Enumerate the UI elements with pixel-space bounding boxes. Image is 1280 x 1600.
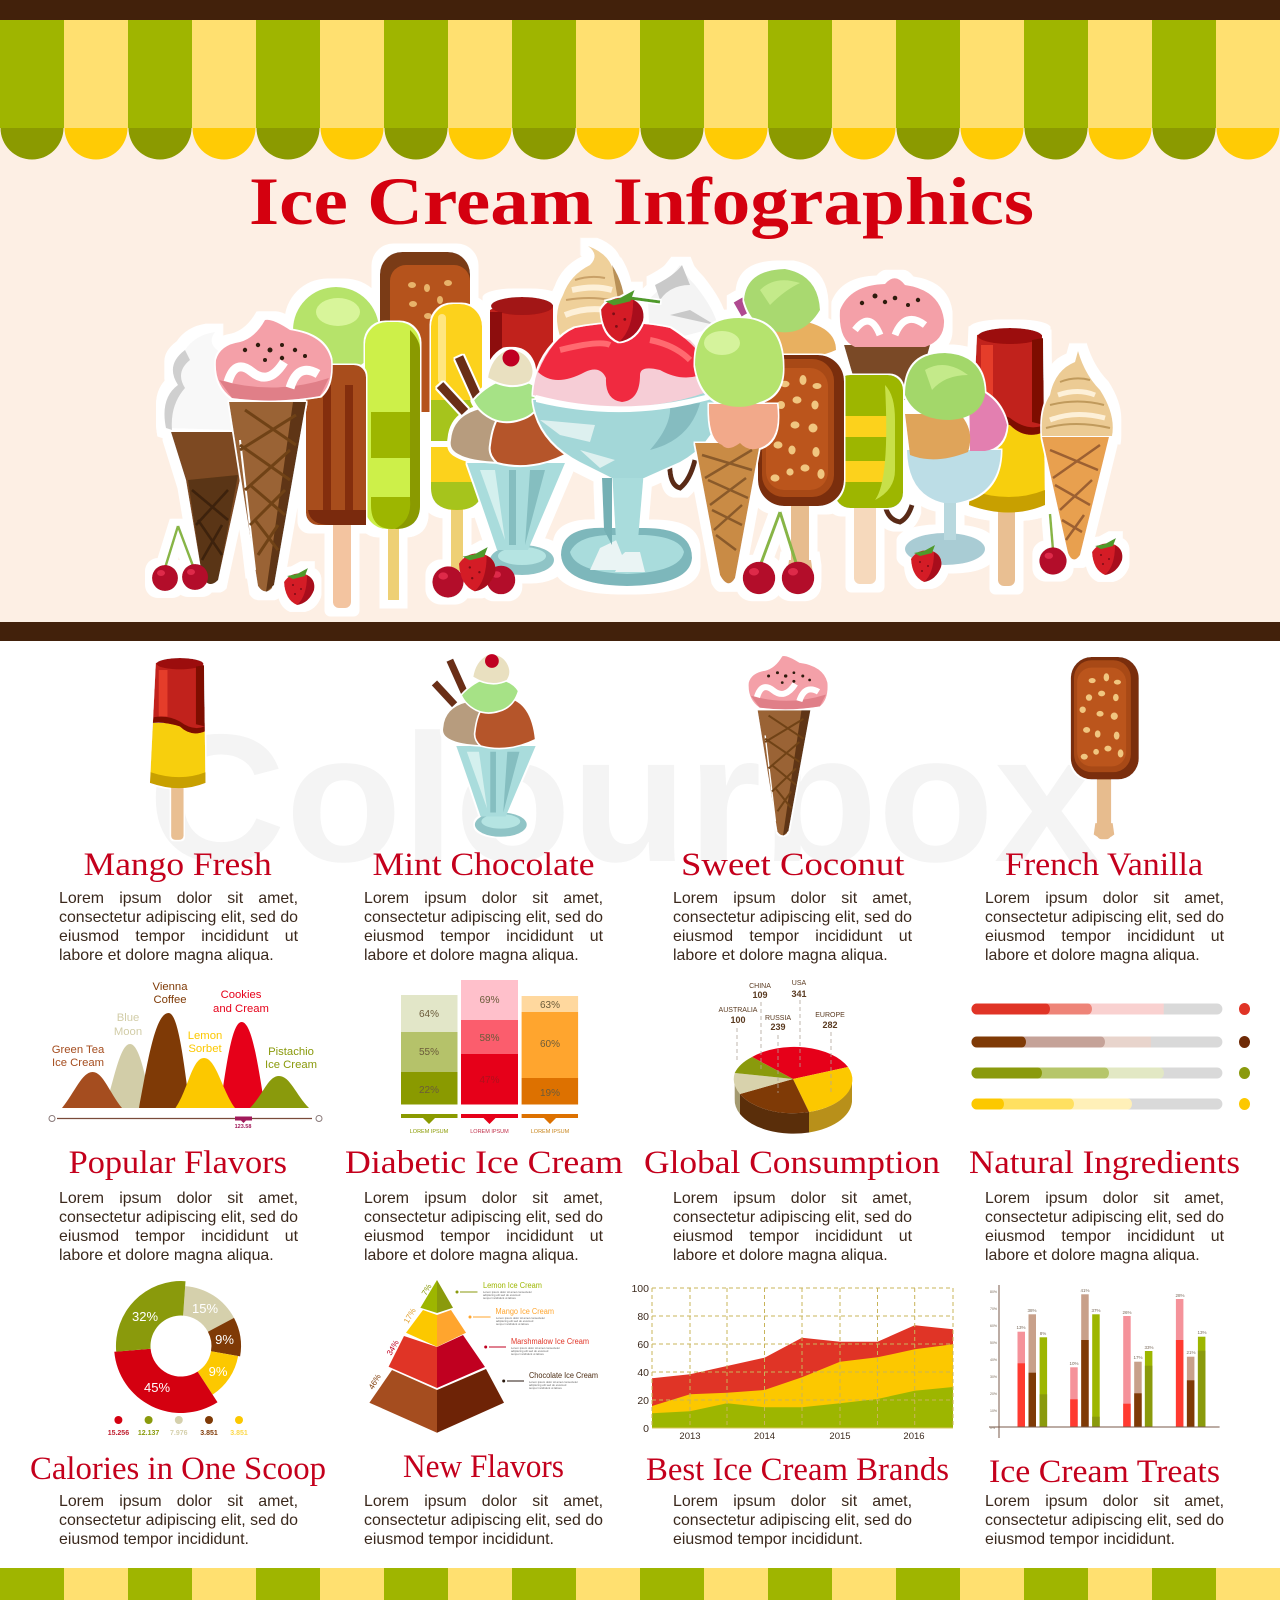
chart: grouped bars: 17% [1133,1355,1143,1360]
chart: donut: 3.851 [230,1430,248,1437]
callout: Chocolate [502,1371,598,1390]
chart: grouped bars: 21% [1186,1350,1196,1355]
strawberry on top [601,290,660,342]
chart: area: 2016 [903,1431,925,1442]
chart: 3D pie: 100 [730,1015,746,1025]
green scoop back [293,287,379,373]
chart: flavor peaks: Lemon [188,1030,222,1042]
callout: Marshmalow: adipiscing elit sed do eiusmod [511,1349,549,1353]
chart: progress bars [971,1003,1250,1110]
chart: donut: 3.851 [200,1430,218,1437]
heading: Ice Cream Treats: Ice Cream Treats [989,1454,1220,1490]
callout: Marshmalow: Marshmalow Ice Cream [511,1337,589,1346]
chart: donut [108,1281,248,1437]
chart: area: 0 [643,1423,649,1435]
chart: pyramid: 34% [385,1339,401,1357]
awning stripes [0,20,1280,160]
panel: Best Ice Cream Brands [631,1283,953,1554]
chart: flavor peaks: Vienna [153,981,188,993]
text: Sweet Coconut body: Lorem ipsum dolor sit amet, consectetur adipiscing elit, sed do eiusmod tempor incididunt ut labore et dolore magna aliqua. [673,890,912,964]
callout: Chocolate: tempor incididunt ut labore [529,1386,562,1390]
heading: Calories in One Scoop: Calories in One Scoop [30,1451,326,1487]
chart: stacked columns: 63% [540,1000,560,1011]
chart: area [631,1283,953,1442]
chart: donut: 15% [192,1301,218,1316]
watermark: Colourbox [148,696,1100,900]
brown popsicle [306,365,366,608]
callout: Chocolate: adipiscing elit sed do eiusmod [529,1383,567,1387]
heading: Global Consumption: Global Consumption [644,1145,940,1181]
heading: Mango Fresh: Mango Fresh [84,847,272,883]
icon: red yellow popsicle [150,658,205,840]
chart: flavor peaks: and Cream [213,1003,269,1015]
panel: Global Consumption [644,980,940,1269]
panel: Calories in One Scoop [30,1281,326,1554]
callout: Mango: Mango Ice Cream [496,1307,554,1316]
heading: Popular Flavors: Popular Flavors [69,1145,287,1181]
chart: stacked columns: LOREM IPSUM [410,1129,449,1135]
chart: area: 100 [631,1283,649,1295]
chart: grouped bars: 40% [990,1358,997,1362]
icon: nut bar [1071,657,1139,839]
chart: stacked columns: 69% [479,995,500,1006]
panel: Sweet Coconut [673,656,914,969]
chocolate bar back [380,252,470,412]
text: Diabetic Ice Cream body: Lorem ipsum dolor sit amet, consectetur adipiscing elit, sed do eiusmod tempor incididunt ut labore et dolore magna aliqua. [364,1190,603,1264]
chart: flavor peaks: Sorbet [188,1043,222,1055]
panel: Mango Fresh [59,658,300,969]
chart: grouped bars: 50% [990,1341,997,1345]
back cone with green scoop [744,269,836,358]
chart: 3D pie: RUSSIA [765,1015,791,1022]
beige swirl behind sundae [557,246,625,345]
panel: Mint Chocolate [364,654,605,969]
chart: grouped bars: 80% [990,1290,997,1294]
panel: French Vanilla [985,657,1226,969]
chart: flavor peaks: 123.58 [235,1124,251,1130]
right small sundae [905,353,1007,565]
chart: 3D pie: 239 [770,1022,786,1032]
panel: Diabetic Ice Cream [345,980,623,1269]
chart: 3D pie: 282 [822,1020,838,1030]
red yellow popsicle [969,328,1045,586]
icon: strawberry cone [749,656,828,836]
strawberry waffle cone [216,320,331,592]
chart: donut: 9% [215,1332,234,1347]
chart: grouped bars: 8% [1040,1331,1046,1336]
chart: grouped bars: 13% [1197,1330,1207,1335]
chart: 3D pie: CHINA [749,983,771,990]
chart: area: 60 [637,1339,649,1351]
chart: grouped bars: 38% [1027,1308,1037,1313]
chart: stacked columns [401,980,578,1135]
chart: grouped bars [989,1285,1220,1438]
chart: flavor peaks: Cookies [221,989,262,1001]
chart: 3D pie: 341 [791,989,807,999]
green yellow bar [835,375,903,584]
callout: Mango: tempor incididunt ut labore [496,1322,529,1326]
chart: stacked columns: LOREM IPSUM [531,1129,570,1135]
lower header brown band [0,622,1280,641]
callout: Lemon: Lorem ipsum dolor sit amet consectetur [483,1290,532,1294]
text: Mint Chocolate body: Lorem ipsum dolor sit amet, consectetur adipiscing elit, sed do eiusmod tempor incididunt ut labore et dolore magna aliqua. [364,890,603,964]
chart: grouped bars: 28% [1175,1293,1185,1298]
text: French Vanilla body: Lorem ipsum dolor sit amet, consectetur adipiscing elit, sed do eiusmod tempor incididunt ut labore et dolore magna aliqua. [985,890,1224,964]
heading: Natural Ingredients: Natural Ingredients [969,1145,1240,1181]
panel: Ice Cream Treats [985,1285,1226,1554]
fruit left [152,526,314,605]
callout: Lemon: tempor incididunt ut labore [483,1296,516,1300]
strawberry cone back [840,278,944,400]
right cream cone [1042,351,1113,560]
chart: donut: 32% [132,1309,158,1324]
chocolate nut bar [758,355,844,580]
chart: 3D pie: EUROPE [815,1012,845,1019]
big sundae [533,323,725,586]
chart: grouped bars: 13% [1016,1325,1026,1330]
callout: Chocolate: Chocolate Ice Cream [529,1371,598,1380]
chart: donut: 15.256 [108,1430,129,1437]
chart: donut: 9% [209,1364,228,1379]
chart: stacked columns: 64% [419,1009,439,1020]
chart: grouped bars: 37% [1091,1308,1101,1313]
chart: flavor peaks: Green Tea [52,1044,105,1056]
text: Treats body: Lorem ipsum dolor sit amet, consectetur adipiscing elit, sed do eiusmod tempor incididunt. [985,1493,1224,1548]
icon: sundae [434,654,536,837]
white swirl cone [164,332,242,584]
chart: stacked columns: 58% [479,1033,500,1044]
chart: stacked columns: 47% [479,1075,500,1086]
chart: grouped bars: 26% [1122,1310,1132,1315]
chart: area: 20 [637,1395,649,1407]
chart: grouped bars: 10% [1069,1361,1079,1366]
chart: flavor peaks: Moon [114,1026,142,1038]
chart: pyramid [367,1280,598,1433]
chart: stacked columns: 60% [540,1039,560,1050]
text: New Flavors body: Lorem ipsum dolor sit amet, consectetur adipiscing elit, sed do eiusmod tempor incididunt. [364,1493,603,1548]
chart: 3D pie: 109 [752,990,768,1000]
chart: flavor peaks: Ice Cream [265,1059,317,1071]
chart: grouped bars: 30% [990,1375,997,1379]
callout: Lemon: Lemon Ice Cream [483,1281,542,1290]
red bar back [490,297,553,400]
chart: grouped bars: 20% [990,1392,997,1396]
callout: Lemon: adipiscing elit sed do eiusmod [483,1293,521,1297]
text: Calories body: Lorem ipsum dolor sit amet, consectetur adipiscing elit, sed do eiusmod tempor incididunt. [59,1493,298,1548]
chart: stacked columns: LOREM IPSUM [470,1129,509,1135]
chart: donut: 12.137 [138,1430,159,1437]
chart: pyramid: 7% [420,1282,434,1297]
callout: Marshmalow [484,1337,589,1356]
chart: stacked columns: 55% [419,1047,439,1058]
chart: flavor peaks: Ice Cream [52,1057,104,1069]
heading: Best Ice Cream Brands: Best Ice Cream Brands [646,1452,949,1488]
chart: grouped bars: 33% [1144,1345,1154,1350]
chart: donut: 7.976 [170,1430,188,1437]
chart: 3D pie: USA [792,980,807,987]
heading: Diabetic Ice Cream: Diabetic Ice Cream [345,1145,623,1181]
lime popsicle [365,322,420,600]
chart: pyramid: 17% [402,1307,418,1325]
chart: flavor peaks: Coffee [153,994,187,1006]
chart: stacked columns: 22% [419,1085,439,1096]
hero ice cream illustration [152,246,1122,608]
top brown band [0,0,1280,20]
chart: area: 2015 [829,1431,851,1442]
back chocolate sticks [670,300,912,522]
chart: 3D pie: AUSTRALIA [719,1007,758,1014]
heading: French Vanilla: French Vanilla [1005,847,1203,883]
panel: New Flavors [364,1280,605,1554]
callout: Mango: adipiscing elit sed do eiusmod [496,1319,534,1323]
chart: grouped bars: 60% [990,1324,997,1328]
fruit center and right [432,512,1122,598]
callout: Marshmalow: Lorem ipsum dolor sit amet consectetur [511,1346,560,1350]
chart: grouped bars: 0% [990,1426,995,1430]
text: Global Consumption body: Lorem ipsum dolor sit amet, consectetur adipiscing elit, sed do eiusmod tempor incididunt ut labore et dolore magna aliqua. [673,1190,912,1264]
callout: Marshmalow: tempor incididunt ut labore [511,1352,544,1356]
heading: New Flavors: New Flavors [403,1449,564,1485]
callout: Mango [468,1307,554,1326]
callout: Lemon [456,1281,542,1300]
yellow popsicle [431,304,482,571]
chart: grouped bars: 70% [990,1307,997,1311]
panel: Popular Flavors [49,981,322,1269]
bottom stripes [0,1568,1280,1600]
chart: 3D pie [719,980,852,1134]
chart: grouped bars: 41% [1080,1288,1090,1293]
chart: stacked columns: 19% [540,1088,560,1099]
chart: area: 2013 [679,1431,701,1442]
chart: flavor peaks [49,981,322,1130]
title: Ice Cream Infographics [249,163,1034,239]
heading: Mint Chocolate: Mint Chocolate [372,847,594,883]
chart: area: 80 [637,1311,649,1323]
text: Best Brands body: Lorem ipsum dolor sit amet, consectetur adipiscing elit, sed do eiusmod tempor incididunt. [673,1493,912,1548]
text: Natural Ingredients body: Lorem ipsum dolor sit amet, consectetur adipiscing elit, sed do eiusmod tempor incididunt ut labore et dolore magna aliqua. [985,1190,1224,1264]
chart: flavor peaks: Pistachio [268,1046,314,1058]
chart: area: 40 [637,1367,649,1379]
text: Mango Fresh body: Lorem ipsum dolor sit amet, consectetur adipiscing elit, sed do eiusmod tempor incididunt ut labore et dolore magna aliqua. [59,890,298,964]
callout: Mango: Lorem ipsum dolor sit amet consectetur [496,1316,545,1320]
heading: Sweet Coconut: Sweet Coconut [681,847,904,883]
panel: Natural Ingredients [969,1003,1250,1269]
chart: donut: 45% [144,1380,170,1395]
header background [0,0,1280,641]
waffle cone with green scoop [695,318,783,583]
chart: flavor peaks: Blue [117,1012,139,1024]
chart: pyramid: 46% [367,1373,383,1391]
callout: Chocolate: Lorem ipsum dolor sit amet consectetur [529,1380,578,1384]
text: Popular Flavors body: Lorem ipsum dolor sit amet, consectetur adipiscing elit, sed do eiusmod tempor incididunt ut labore et dolore magna aliqua. [59,1190,298,1264]
chart: area: 2014 [754,1431,775,1442]
chart: grouped bars: 10% [990,1409,997,1413]
white swirl behind sundae [648,265,718,345]
small sundae [440,349,565,575]
